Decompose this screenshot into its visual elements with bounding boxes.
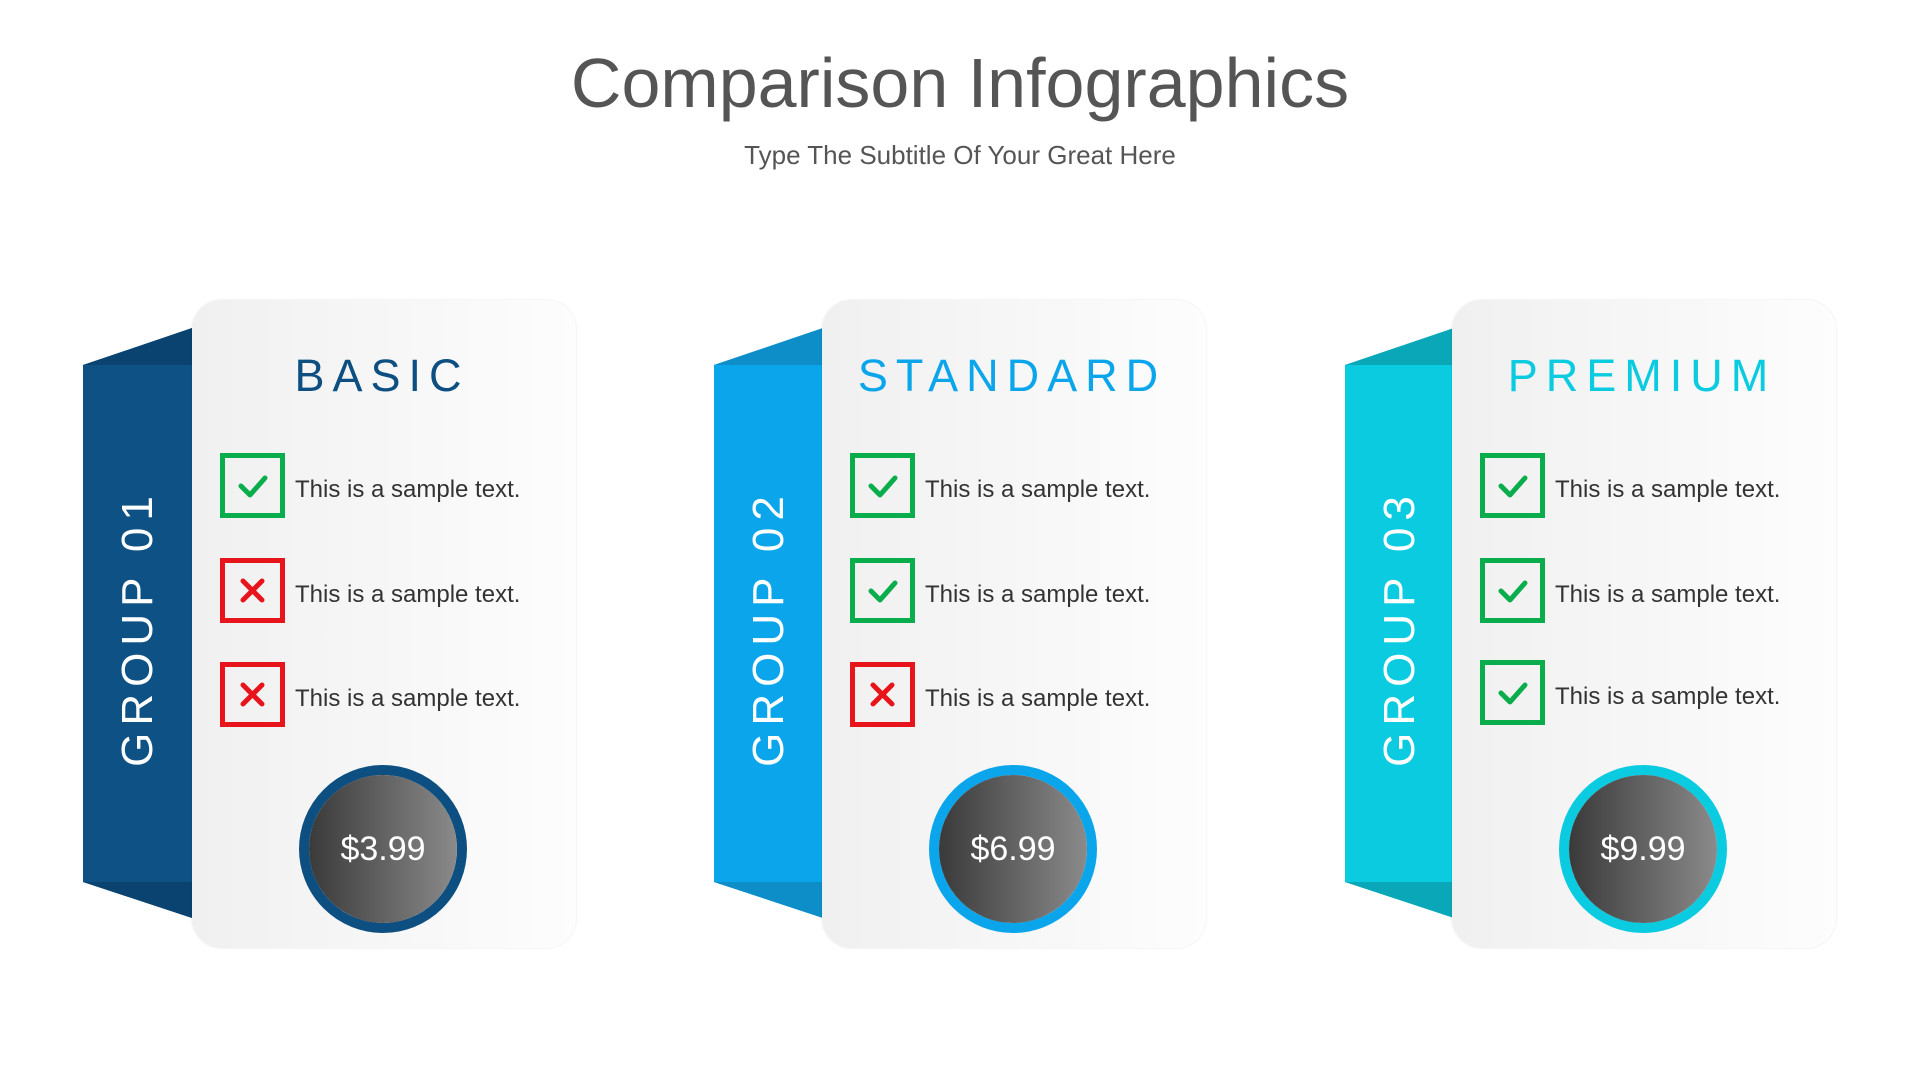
row 3 cross: This is a sample text.: [925, 685, 1150, 712]
row 2 check: [850, 558, 1150, 623]
panel: group 01 band: [83, 328, 192, 918]
price badge: $6.99: [970, 830, 1056, 868]
label: group 03: GROUP 03: [1375, 489, 1424, 767]
price badge: $3.99: [340, 830, 426, 868]
price badge: [299, 765, 467, 933]
row 3 check: [1480, 660, 1780, 725]
row 3 check: This is a sample text.: [1555, 683, 1780, 710]
row 1 check: [220, 453, 520, 518]
row 1 check: This is a sample text.: [1555, 476, 1780, 503]
panel: group 03 band: [1345, 328, 1452, 918]
panel: premium card: [1452, 300, 1836, 948]
row 1 check: This is a sample text.: [925, 476, 1150, 503]
row 1 check: This is a sample text.: [295, 476, 520, 503]
row 1 check: [1480, 453, 1780, 518]
row 2 check: This is a sample text.: [925, 581, 1150, 608]
row 3 cross: This is a sample text.: [295, 685, 520, 712]
row 2 check: [1480, 558, 1780, 623]
label: group 01: GROUP 01: [113, 489, 162, 767]
price badge: [929, 765, 1097, 933]
panel: standard card: [822, 300, 1206, 948]
row 3 cross: [850, 662, 1150, 727]
row 2 cross: [220, 558, 520, 623]
title: Comparison Infographics: [571, 44, 1349, 122]
row 2 cross: This is a sample text.: [295, 581, 520, 608]
row 2 check: This is a sample text.: [1555, 581, 1780, 608]
row 1 check: [850, 453, 1150, 518]
row 3 cross: [220, 662, 520, 727]
panel: group 02 band: [714, 328, 822, 918]
heading: standard: STANDARD: [858, 350, 1166, 401]
label: group 02: GROUP 02: [744, 489, 793, 767]
heading: premium: PREMIUM: [1508, 350, 1776, 401]
heading: basic: BASIC: [294, 350, 470, 401]
price badge: [1559, 765, 1727, 933]
price badge: $9.99: [1600, 830, 1686, 868]
subtitle: Type The Subtitle Of Your Great Here: [744, 140, 1176, 170]
panel: basic card: [192, 300, 576, 948]
